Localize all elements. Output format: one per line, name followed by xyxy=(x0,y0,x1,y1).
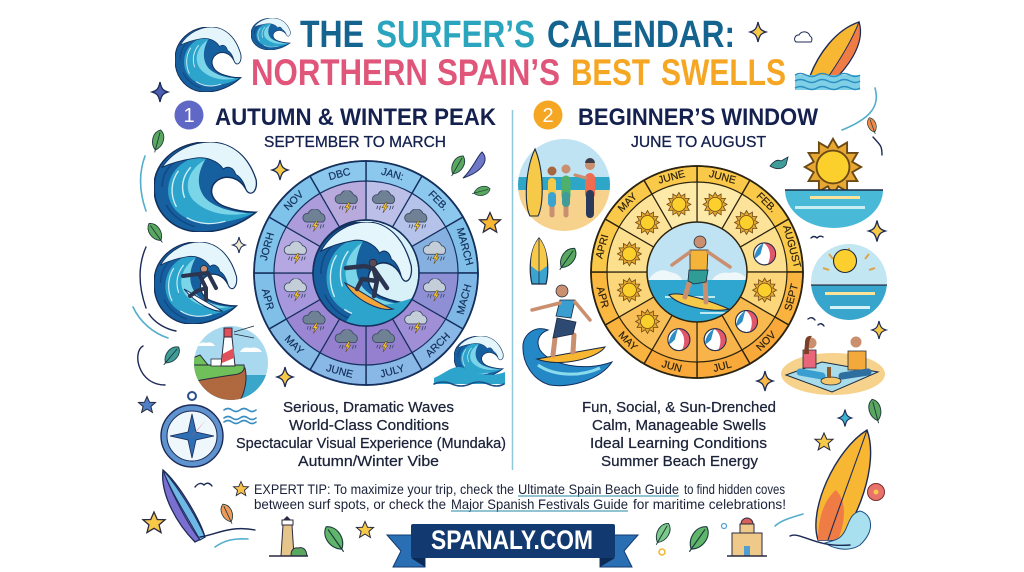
icon: bottom right leaf xyxy=(684,523,713,556)
heading: beginners window: JUNE TO AUGUST xyxy=(631,134,766,151)
icon: left surfboard xyxy=(163,470,255,547)
month labels: JUNE xyxy=(325,362,354,381)
icon: right surfboard xyxy=(775,430,871,549)
month labels: JUN xyxy=(660,358,683,375)
icon: right gold star xyxy=(815,433,833,450)
callout: expert tip: Ultimate Spain Beach Guide xyxy=(518,481,679,497)
month labels: MAY xyxy=(616,191,640,215)
icon: oak leaf xyxy=(555,245,580,273)
icon: blue star xyxy=(138,396,156,412)
icon: beginner surfer on wave xyxy=(523,285,612,386)
month labels: APR xyxy=(259,287,276,312)
month labels: DBC xyxy=(327,166,352,183)
callout: expert tip: Major Spanish Festivals Guide xyxy=(451,496,628,512)
icon: bottom lighthouse xyxy=(269,516,308,556)
heading: beginners window: BEGINNER’S WINDOW xyxy=(578,104,818,131)
icon: bottom green leaf left xyxy=(320,523,349,556)
icon: right green leaf xyxy=(867,398,884,425)
month labels xyxy=(258,166,475,381)
month labels: MARCH xyxy=(454,226,475,267)
icon: gold star by wheel xyxy=(480,212,500,232)
callout: expert tip xyxy=(234,481,786,512)
panel: left illustrations xyxy=(133,129,270,405)
title: SURFER’S xyxy=(376,14,535,56)
heading: autumn and winter peak xyxy=(174,100,497,151)
callout: expert tip: between surf spots, or check the xyxy=(254,496,446,512)
title: SWELLS xyxy=(661,52,786,93)
heading: autumn and winter peak: SEPTEMBER TO MARCH xyxy=(264,134,446,151)
title: SPAIN’S xyxy=(437,52,560,93)
icon: big wave xyxy=(154,142,256,232)
wheel: summer calendar xyxy=(590,165,804,379)
month labels: ARCH xyxy=(423,330,453,360)
text block: left features: Spectacular Visual Experience (Mundaka) xyxy=(236,435,506,452)
text block: right features: Ideal Learning Conditions xyxy=(590,435,767,452)
hub: surfer in barrel xyxy=(313,220,425,330)
icon: leaves and feather xyxy=(447,152,491,198)
month labels: NOV xyxy=(282,189,306,213)
title: THE xyxy=(300,14,364,56)
panel: right illustrations xyxy=(518,139,887,395)
icon: gold sparkle xyxy=(750,22,766,42)
icon: teal sparkle xyxy=(838,410,852,426)
title xyxy=(251,14,786,93)
icon: top right surfboard xyxy=(795,22,860,90)
heading: autumn and winter peak: AUTUMN & WINTER PEAK xyxy=(215,104,497,131)
text block: left features: World-Class Conditions xyxy=(289,417,449,434)
icon: teal leaf xyxy=(160,344,183,368)
text block: left features xyxy=(236,399,506,470)
icon: bottom ring blue xyxy=(722,524,726,528)
icon: lighthouse scene xyxy=(194,326,268,400)
heading: beginners window: 2 xyxy=(542,105,554,127)
banner: spanaly.com: SPANALY.COM xyxy=(431,525,593,555)
icon: birds xyxy=(808,236,824,326)
month labels: SEPT xyxy=(782,282,801,312)
text block: right features xyxy=(582,399,776,470)
month labels: MACH xyxy=(455,283,474,316)
month labels xyxy=(593,168,803,375)
title: CALENDAR: xyxy=(547,14,735,56)
icon: orange leaf top right xyxy=(866,116,879,135)
text block: right features: Fun, Social, & Sun-Drenched xyxy=(582,399,776,416)
text block: right features: Summer Beach Energy xyxy=(601,453,758,470)
banner: spanaly.com xyxy=(387,524,638,567)
icon: bottom gold star xyxy=(356,522,374,537)
month labels: MAY xyxy=(282,333,306,357)
callout: expert tip: for maritime celebrations! xyxy=(633,496,786,512)
sun and beach ball icons xyxy=(617,192,777,351)
panel: compass xyxy=(161,392,256,467)
icon: sun over sea xyxy=(785,139,883,230)
month labels: JORH xyxy=(258,231,277,262)
icon: cathedral xyxy=(727,518,767,556)
month labels: JULY xyxy=(379,363,406,381)
title: NORTHERN xyxy=(251,52,428,93)
heading: beginners window xyxy=(534,100,818,151)
icon: gold star left xyxy=(143,512,165,533)
icon: small title wave xyxy=(251,18,290,50)
storm cloud icons xyxy=(284,190,445,352)
icon: orange sparkle xyxy=(757,371,773,391)
hub: beginner surfer xyxy=(645,220,749,325)
callout: expert tip: to find hidden coves xyxy=(684,481,785,497)
title: BEST xyxy=(571,52,650,93)
icon: picnic sparkle xyxy=(872,321,886,339)
icon: green leaf top xyxy=(149,129,166,154)
heading: autumn and winter peak: 1 xyxy=(183,105,195,127)
icon: gold sparkle wheel bottom xyxy=(277,367,293,387)
icon: beach group scene xyxy=(518,139,610,232)
icon: picnic scene xyxy=(781,336,885,395)
month labels: FEB. xyxy=(426,188,451,213)
icon: coral flower xyxy=(868,484,884,500)
text block: left features: Autumn/Winter Vibe xyxy=(298,453,439,470)
month labels: JUL xyxy=(712,358,733,375)
icon: teal bird xyxy=(770,157,788,169)
month labels: MAY xyxy=(616,329,640,353)
text block: right features: Calm, Manageable Swells xyxy=(592,417,766,434)
text block: left features: Serious, Dramatic Waves xyxy=(283,399,454,416)
icon: wave by left wheel xyxy=(434,336,505,386)
month labels: APRI xyxy=(593,233,611,260)
callout: expert tip: EXPERT TIP: To maximize your trip, check the xyxy=(254,481,514,497)
decorative right curve xyxy=(842,88,876,130)
month labels: AUGUST xyxy=(780,224,803,270)
outer month ring xyxy=(241,148,491,398)
month labels: JUNE xyxy=(657,168,686,187)
icon: sparkle xyxy=(233,237,245,253)
month labels: FEB. xyxy=(754,190,779,215)
month labels: APR xyxy=(594,285,611,310)
icon: green leaf middle xyxy=(145,220,167,246)
icon: bottom ring xyxy=(659,549,665,555)
month labels: JUNE xyxy=(708,168,737,187)
icon: top left wave xyxy=(175,27,241,92)
icon: sun circle scene xyxy=(811,244,887,321)
icon: bottom right leaf slim xyxy=(651,521,673,548)
icon: navy sparkle xyxy=(152,82,168,102)
icon: small surfboard xyxy=(530,238,548,284)
icon: wave with surfer xyxy=(154,242,237,324)
month labels: JAN: xyxy=(380,166,405,183)
icon: sun sparkle xyxy=(869,220,885,242)
month labels: NOV xyxy=(754,329,779,354)
outer month ring and segments xyxy=(579,154,815,390)
icon: gold sparkle wheel top xyxy=(272,160,288,180)
icon: orange leaf xyxy=(218,502,237,526)
wheel: autumn and winter calendar xyxy=(253,160,479,386)
